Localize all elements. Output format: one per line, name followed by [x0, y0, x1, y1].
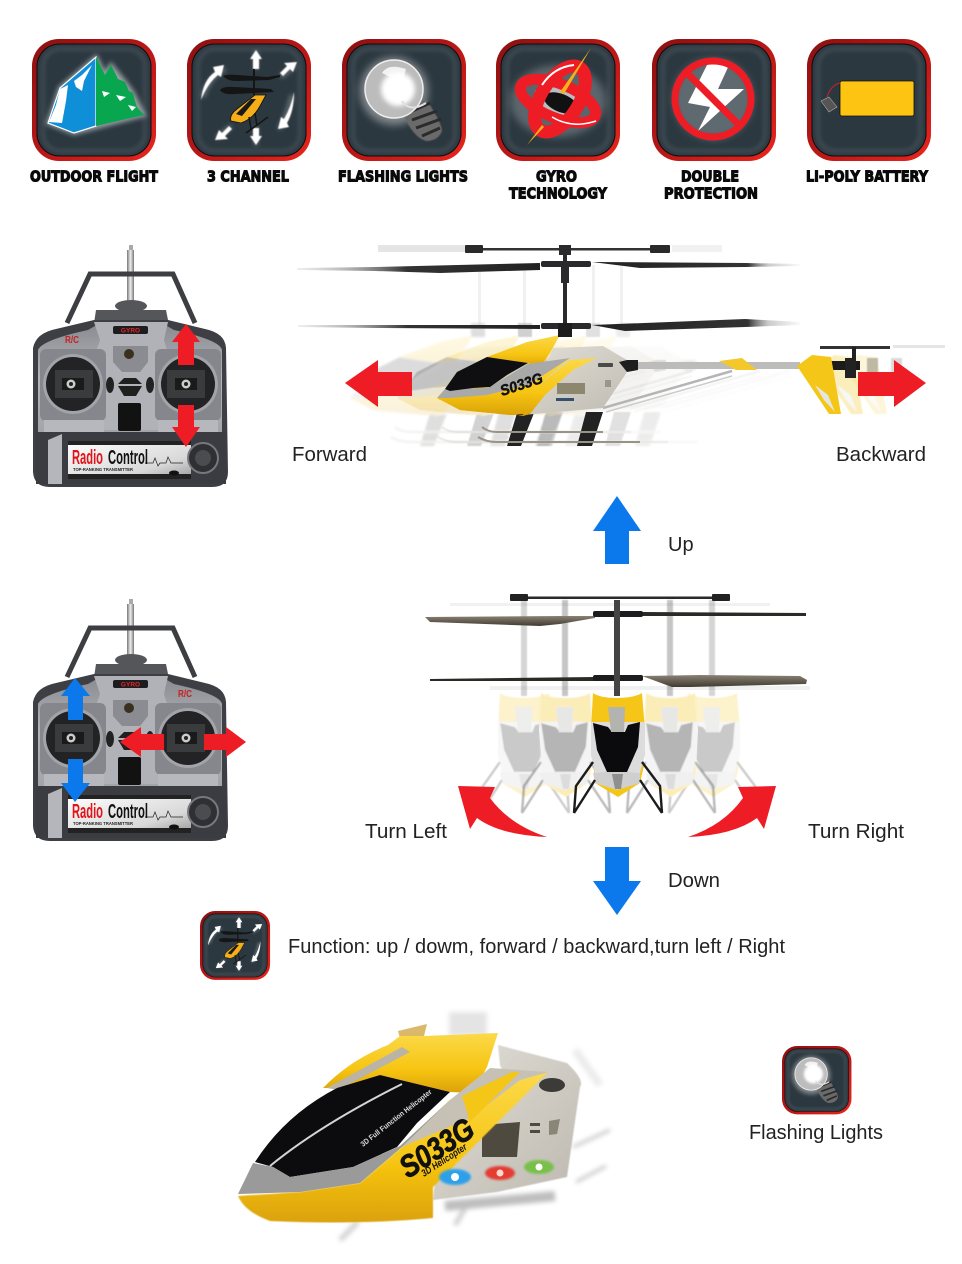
plate cut-outs [482, 1078, 565, 1157]
label: turn right: Turn Right [808, 821, 904, 843]
tail fin [797, 355, 856, 414]
label: gyro technology [509, 168, 608, 202]
label: double protection: PROTECTION [664, 184, 758, 202]
label: double protection: DOUBLE [681, 168, 739, 186]
panel: helicopter close-up [238, 1012, 610, 1240]
model name: S033G [393, 1111, 481, 1185]
mast and struts [340, 1012, 610, 1240]
panel details [556, 363, 613, 401]
yellow upper canopy [323, 1033, 498, 1093]
controller label: radio control: Radio [72, 447, 103, 469]
gold canopy cap [398, 1024, 427, 1038]
label: gyro technology: TECHNOLOGY [509, 184, 608, 202]
icon: double protection [652, 39, 776, 161]
label: down: Down [668, 870, 720, 892]
arrow: turn right [688, 786, 776, 837]
panel: controller forward/backward [33, 245, 228, 487]
icon: outdoor flight [32, 39, 156, 161]
text: function description: Function: up / dowm, forward / backward,turn left / Right [288, 936, 785, 958]
model name: S033G [498, 370, 545, 400]
upper rotor [425, 611, 806, 626]
helicopter body [437, 323, 732, 446]
icon: li-poly battery [807, 39, 931, 161]
tail boom [638, 358, 860, 370]
label: gyro technology: GYRO [536, 168, 577, 186]
controller label: gyro: GYRO [121, 682, 140, 688]
arrow: turn left [120, 727, 164, 757]
label: outdoor flight: OUTDOOR FLIGHT [30, 168, 158, 186]
controller label: radio control [72, 447, 148, 472]
panel: controller turn and altitude [33, 599, 246, 841]
panel: side view helicopter [297, 245, 945, 446]
windshield text: 3D Full Function Helicopter [359, 1087, 434, 1149]
label: up: Up [668, 534, 694, 556]
controller label: radio control [72, 801, 148, 826]
subtitle: 3D Helicopter [420, 1141, 470, 1180]
controller label: R/C: R/C [65, 335, 79, 346]
panel: feature icons [30, 39, 931, 202]
icon: gyro technology [496, 39, 620, 161]
panel: front view helicopter [425, 594, 810, 813]
icon: 3 channel [187, 39, 311, 161]
windshield highlight [270, 1084, 402, 1166]
lower rotor [430, 675, 807, 687]
flybar [465, 245, 670, 253]
silver nose band [238, 1100, 450, 1194]
helicopter body [574, 600, 662, 813]
label: 3 channel: 3 CHANNEL [207, 168, 289, 186]
icon: function small 3 channel [200, 911, 270, 980]
upper rotor [297, 262, 800, 273]
lower rotor [298, 319, 800, 331]
upper side stripes [402, 1068, 548, 1147]
controller label: radio control: TOP-RANKING TRANSMITTER [73, 467, 134, 472]
canopy window strip [327, 1047, 410, 1090]
controller label: radio control: Radio [72, 801, 103, 823]
label: li-poly battery: LI-POLY BATTERY [806, 168, 929, 186]
icon: flashing lights small [782, 1046, 851, 1114]
arrow: down [593, 847, 641, 915]
yellow lower body [238, 1072, 548, 1222]
LED: red [485, 1166, 515, 1180]
LED: green [524, 1160, 554, 1174]
label: turn left: Turn Left [365, 821, 447, 843]
controller label: radio control: Control [108, 447, 148, 469]
label: forward: Forward [292, 444, 367, 466]
controller label: radio control: TOP-RANKING TRANSMITTER [73, 821, 134, 826]
arrow: stick up [172, 324, 200, 365]
ghost flight trail [350, 245, 902, 446]
side plate [433, 1045, 581, 1200]
icon: flashing lights [342, 39, 466, 161]
arrow: backward [858, 360, 926, 407]
label: backward: Backward [836, 444, 926, 466]
arrow: turn left [458, 786, 547, 837]
tail rotor [820, 345, 945, 361]
controller label: R/C: R/C [178, 689, 192, 700]
arrow: stick down [61, 759, 90, 802]
arrow: up [593, 496, 641, 564]
rotor mast [541, 245, 591, 329]
label: flashing lights: Flashing Lights [749, 1122, 883, 1144]
flybar [510, 594, 730, 601]
controller label: gyro: GYRO [121, 328, 140, 334]
LED: blue [439, 1169, 471, 1185]
controller label: radio control: Control [108, 801, 148, 823]
ghost turn trail [450, 600, 810, 813]
arrow: turn right [204, 727, 246, 757]
arrow: forward [345, 360, 412, 407]
arrow: stick down [172, 405, 200, 447]
black windshield [255, 1075, 450, 1177]
arrow: stick up [61, 678, 90, 720]
label: flashing lights: FLASHING LIGHTS [338, 168, 468, 186]
label: double protection [664, 168, 758, 202]
